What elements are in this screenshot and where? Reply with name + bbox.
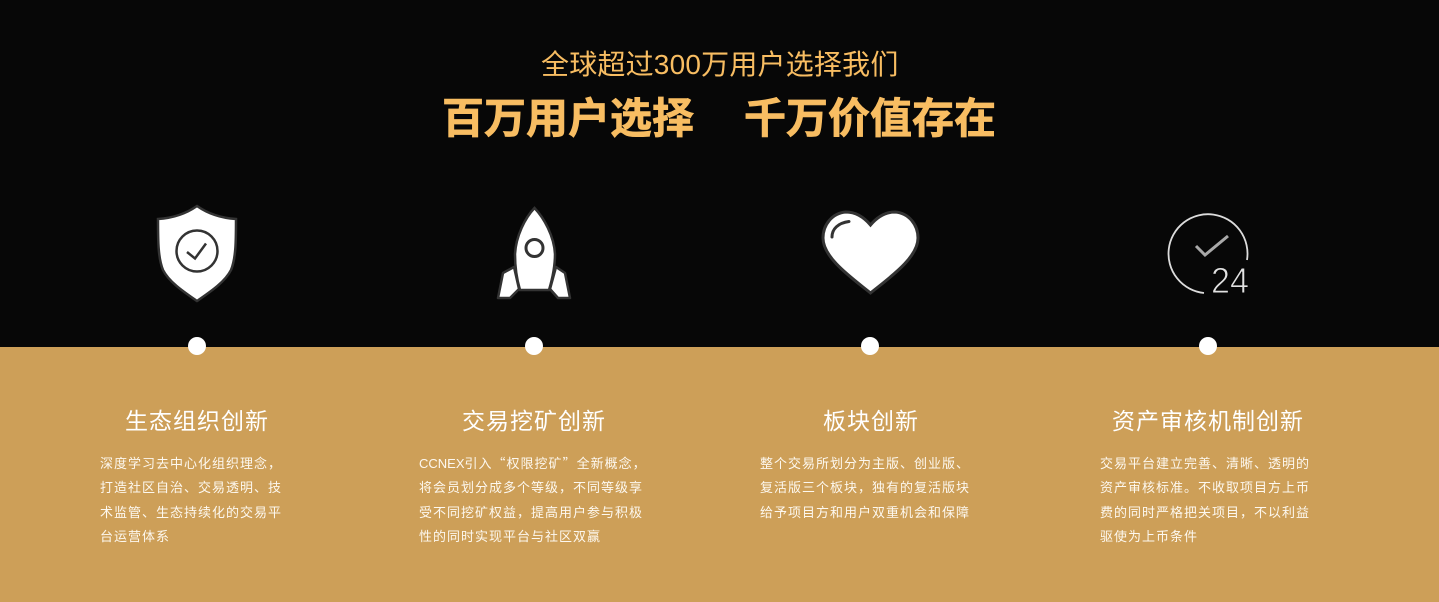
text: ecosystem — [100, 456, 282, 544]
icon: shield with check — [156, 204, 238, 302]
text: ecosystem: 术监管、生态持续化的交易平 — [100, 504, 282, 520]
icon: rocket — [496, 206, 572, 300]
heading: audit: 资产审核机制创新 — [1112, 408, 1304, 434]
heading: board: 板块创新 — [823, 408, 919, 434]
text: ecosystem: 深度学习去中心化组织理念， — [100, 456, 282, 470]
text: mining — [419, 452, 647, 544]
text: mining: CCNEX引入“权限挖矿”全新概念， — [419, 452, 647, 472]
icon: 24-hour clock with check — [1168, 213, 1249, 301]
marker dot 2 — [525, 337, 543, 355]
marker dot 1 — [188, 337, 206, 355]
text: audit: 费的同时严格把关项目，不以利益 — [1100, 504, 1310, 520]
text: ecosystem: 台运营体系 — [100, 529, 170, 544]
subtitle: 全球超过300万用户选择我们 — [541, 49, 899, 80]
heading: mining: 交易挖矿创新 — [462, 408, 606, 434]
heading: ecosystem: 生态组织创新 — [125, 408, 269, 434]
text: audit: 交易平台建立完善、清晰、透明的 — [1100, 456, 1310, 470]
text: board: 整个交易所划分为主版、创业版、 — [760, 456, 970, 470]
text: audit: 驱使为上币条件 — [1100, 529, 1198, 544]
gold lower band — [0, 347, 1439, 602]
text: mining: 性的同时实现平台与社区双赢 — [419, 529, 601, 544]
text: mining: 受不同挖矿权益，提高用户参与积极 — [419, 504, 643, 520]
text: board: 给予项目方和用户双重机会和保障 — [760, 504, 970, 520]
marker dot 4 — [1199, 337, 1217, 355]
icon: heart — [822, 210, 920, 295]
text: ecosystem: 打造社区自治、交易透明、技 — [100, 480, 282, 495]
icon: 24-hour clock with check: 24 — [1211, 260, 1249, 301]
main heading: 百万用户选择 千万价值存在 — [442, 95, 996, 142]
text: audit: 资产审核标准。不收取项目方上币 — [1100, 480, 1310, 495]
text: board — [760, 456, 970, 520]
text: board: 复活版三个板块，独有的复活版块 — [760, 480, 970, 495]
text: mining: 将会员划分成多个等级，不同等级享 — [419, 480, 643, 495]
marker dot 3 — [861, 337, 879, 355]
text: audit — [1100, 456, 1310, 544]
